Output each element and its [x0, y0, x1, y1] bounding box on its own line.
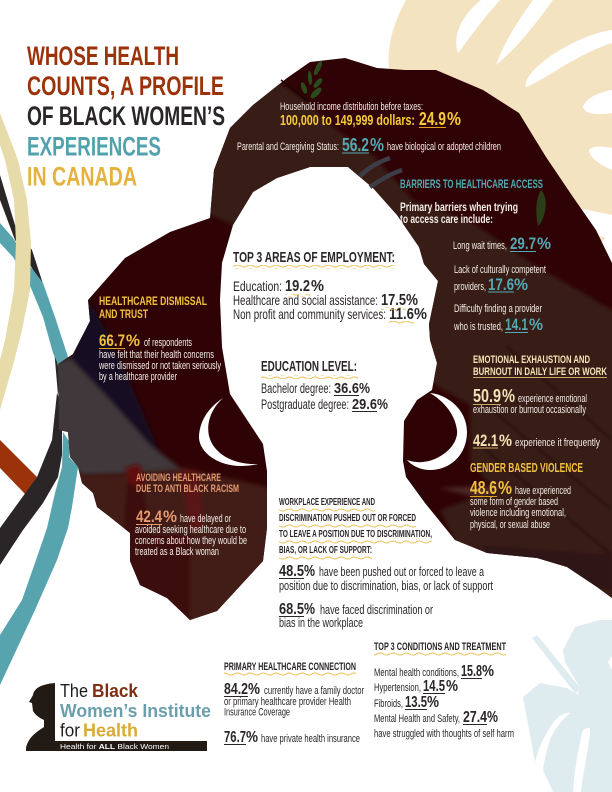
panel: education level: 36.6 — [334, 381, 359, 397]
title: OF BLACK WOMEN’S — [27, 101, 225, 131]
panel: barriers to healthcare access: 17.6 — [488, 275, 514, 294]
panel: avoiding healthcare due to anti black racism: concerns about how they would be — [135, 535, 247, 547]
logo: The Black Women's Institute for Health: Health — [83, 720, 138, 740]
panel: workplace experience and discrimination: DISCRIMINATION PUSHED OUT OR FORCED — [279, 513, 416, 524]
panel: healthcare dismissal and trust: AND TRUST — [99, 307, 148, 321]
panel: top 3 areas of employment: % — [311, 278, 324, 295]
panel: barriers to healthcare access — [400, 179, 551, 334]
panel: gender based violence: physical, or sexual abuse — [470, 519, 550, 531]
hair region: lower brown and maroon folds — [80, 462, 267, 620]
panel: top 3 areas of employment: 19.2 — [285, 278, 310, 295]
panel: top 3 conditions and treatment: 15.8 — [461, 663, 482, 680]
panel: top 3 areas of employment: % — [414, 306, 427, 323]
panel: primary healthcare connection: % — [248, 681, 260, 698]
panel: healthcare dismissal and trust: of respondents — [144, 337, 192, 349]
parental status stat: % — [370, 135, 384, 155]
panel: gender based violence: % — [498, 478, 512, 498]
household income stat: 24.9 — [419, 109, 446, 129]
title — [27, 41, 225, 192]
panel: top 3 conditions and treatment: % — [487, 709, 498, 726]
panel: top 3 conditions and treatment: Mental health conditions, — [374, 667, 459, 679]
panel: primary healthcare connection: Insurance Coverage — [224, 706, 290, 718]
panel: top 3 areas of employment: % — [406, 292, 418, 309]
panel: workplace experience and discrimination: % — [304, 601, 315, 618]
panel: barriers to healthcare access: % — [529, 315, 543, 334]
panel: top 3 conditions and treatment: Mental Health and Safety, — [374, 713, 460, 725]
panel: emotional exhaustion and burnout — [473, 354, 607, 450]
panel: education level: EDUCATION LEVEL: — [261, 358, 357, 375]
hair region: brown arm and hand — [210, 82, 612, 598]
panel: workplace experience and discrimination: 48.5 — [279, 563, 304, 580]
panel: primary healthcare connection: % — [246, 729, 258, 746]
decorative arc: rust band — [0, 440, 37, 495]
hair and profile silhouette — [58, 58, 612, 620]
panel: healthcare dismissal and trust: % — [126, 331, 140, 350]
title: WHOSE HEALTH — [27, 41, 179, 71]
panel: emotional exhaustion and burnout: % — [499, 431, 512, 450]
panel: gender based violence: have experienced — [515, 485, 571, 497]
panel: workplace experience and discrimination: 68.5 — [279, 601, 304, 618]
title: IN CANADA — [27, 162, 137, 192]
decorative arc: beige band — [0, 113, 31, 410]
panel: workplace experience and discrimination: TO LEAVE A POSITION DUE TO DISCRIMINATION, — [279, 529, 432, 540]
logo: The Black Women's Institute for Health: Health for ALL Black Women — [60, 742, 169, 751]
parental status stat: 56.2 — [342, 135, 369, 155]
panel: workplace experience and discrimination: have been pushed out or forced to leave a — [319, 564, 485, 579]
icon: top leaf sprig — [281, 60, 324, 101]
icon: right leaf sprig — [536, 190, 546, 226]
parental status stat: have biological or adopted children — [387, 141, 501, 153]
decorative arc: teal lower band — [0, 432, 78, 685]
panel: gender based violence: some form of gender based — [470, 496, 558, 508]
panel: top 3 areas of employment: TOP 3 AREAS OF EMPLOYMENT: — [233, 249, 395, 266]
logo: The Black Women's Institute for Health — [26, 681, 211, 751]
panel: top 3 conditions and treatment: Hypertension, — [374, 682, 421, 694]
title: EXPERIENCES — [27, 132, 161, 162]
panel: top 3 conditions and treatment: TOP 3 CONDITIONS AND TREATMENT — [374, 641, 506, 653]
panel: top 3 conditions and treatment: have struggled with thoughts of self harm — [374, 728, 514, 740]
panel: workplace experience and discrimination: bias in the workplace — [279, 615, 363, 630]
panel: primary healthcare connection: or primary healthcare provider Health — [224, 696, 351, 708]
panel: avoiding healthcare due to anti black racism: % — [163, 507, 177, 526]
panel: barriers to healthcare access: 29.7 — [510, 234, 536, 253]
hair region: navy and gray fabric — [58, 300, 182, 476]
panel: barriers to healthcare access: BARRIERS TO HEALTHCARE ACCESS — [400, 179, 543, 191]
panel: barriers to healthcare access: to access care include: — [400, 212, 493, 226]
panel: top 3 areas of employment: 11.6 — [389, 306, 414, 323]
background leaf: pale teal monstera — [523, 620, 612, 792]
icon: bracelet — [360, 158, 402, 187]
panel: barriers to healthcare access: 14.1 — [505, 315, 528, 334]
panel: avoiding healthcare due to anti black racism: 42.4 — [136, 507, 162, 526]
panel: healthcare dismissal and trust: by a healthcare provider — [99, 371, 177, 383]
panel: workplace experience and discrimination: % — [304, 563, 315, 580]
logo: The Black Women's Institute for Health: The — [60, 681, 88, 701]
panel: education level: Bachelor degree: — [261, 381, 331, 396]
panel: barriers to healthcare access: % — [537, 234, 551, 253]
panel: healthcare dismissal and trust: HEALTHCARE DISMISSAL — [99, 294, 207, 308]
panel: education level: % — [359, 381, 370, 397]
panel: barriers to healthcare access: Lack of culturally competent — [454, 264, 546, 276]
panel: primary healthcare connection: 76.7 — [224, 729, 246, 746]
panel: healthcare dismissal and trust: 66.7 — [99, 331, 125, 350]
panel: workplace experience and discrimination: BIAS, OR LACK OF SUPPORT: — [279, 545, 372, 556]
left crescent — [199, 398, 258, 466]
panel: healthcare dismissal and trust: were dismissed or not taken seriously — [98, 360, 221, 372]
panel: avoiding healthcare due to anti black racism: DUE TO ANTI BLACK RACISM — [136, 483, 239, 495]
panel: top 3 areas of employment — [233, 249, 427, 324]
panel: healthcare dismissal and trust: have felt that their health concerns — [99, 349, 214, 361]
panel: top 3 areas of employment: Healthcare and social assistance: — [233, 292, 378, 308]
panel: avoiding healthcare due to anti black racism: have delayed or — [180, 513, 231, 525]
panel: gender based violence: 48.6 — [470, 478, 497, 498]
panel: top 3 conditions and treatment — [374, 641, 514, 740]
panel: avoiding healthcare due to anti black racism: treated as a Black woman — [135, 546, 219, 558]
panel: top 3 conditions and treatment: Fibroids, — [374, 698, 403, 710]
panel: top 3 conditions and treatment: 14.5 — [423, 678, 445, 695]
panel: avoiding healthcare due to anti black racism: AVOIDING HEALTHCARE — [136, 472, 221, 484]
parental status stat: Parental and Caregiving Status: — [237, 141, 339, 153]
household income stat: 100,000 to 149,999 dollars: — [280, 113, 415, 129]
panel: top 3 areas of employment: Non profit and community services: — [233, 306, 386, 322]
panel: healthcare dismissal and trust — [98, 294, 221, 383]
panel: workplace experience and discrimination: position due to discrimination, bias, or lack of support — [279, 578, 493, 593]
panel: avoiding healthcare due to anti black racism: avoided seeking healthcare due to — [135, 524, 246, 536]
panel: education level: Postgraduate degree: — [261, 397, 349, 412]
parental status stat — [237, 135, 501, 155]
panel: education level — [261, 358, 388, 413]
panel: primary healthcare connection: PRIMARY HEALTHCARE CONNECTION — [224, 661, 356, 673]
decorative arc: black lower band — [0, 393, 62, 565]
background leaf: beige monstera — [388, 0, 612, 243]
panel: workplace experience and discrimination: WORKPLACE EXPERIENCE AND — [279, 497, 375, 508]
panel: gender based violence — [470, 460, 583, 531]
panel: top 3 conditions and treatment: 27.4 — [463, 709, 487, 726]
logo: The Black Women's Institute for Health: Black — [92, 681, 139, 701]
panel: emotional exhaustion and burnout: 50.9 — [473, 386, 501, 406]
panel: barriers to healthcare access: Difficulty finding a provider — [454, 303, 542, 315]
panel: workplace experience and discrimination: have faced discrimination or — [320, 602, 433, 617]
household income stat: % — [447, 109, 461, 129]
right crescent — [407, 393, 467, 470]
logo: The Black Women's Institute for Health: for — [60, 720, 80, 740]
household income stat: Household income distribution before taxes: — [280, 101, 423, 113]
panel: gender based violence: violence including emotional, — [470, 507, 566, 519]
panel: emotional exhaustion and burnout: % — [502, 386, 515, 406]
panel: education level: % — [377, 397, 388, 413]
panel: barriers to healthcare access: who is trusted, — [453, 321, 503, 333]
panel: education level: 29.6 — [352, 397, 377, 413]
panel: barriers to healthcare access: Long wait times, — [453, 240, 507, 252]
panel: primary healthcare connection — [224, 661, 364, 746]
decorative arc: teal upper band — [0, 223, 68, 382]
decorative arc: black upper band — [0, 175, 62, 395]
panel: primary healthcare connection: currently have a family doctor — [264, 685, 364, 697]
household income stat — [280, 101, 461, 129]
panel: top 3 conditions and treatment: % — [446, 678, 458, 695]
panel: top 3 conditions and treatment: 13.5 — [405, 694, 427, 711]
icon: logo silhouette and bar — [26, 683, 207, 751]
panel: workplace experience and discrimination — [279, 497, 493, 630]
panel: barriers to healthcare access: % — [514, 275, 528, 294]
panel: barriers to healthcare access: Primary barriers when trying — [400, 200, 518, 214]
panel: top 3 conditions and treatment: % — [482, 663, 494, 680]
panel: top 3 areas of employment: 17.5 — [381, 292, 406, 309]
panel: emotional exhaustion and burnout: 42.1 — [473, 431, 498, 450]
panel: primary healthcare connection: 84.2 — [224, 681, 248, 698]
panel: top 3 areas of employment: Education: — [233, 278, 282, 294]
panel: avoiding healthcare due to anti black racism — [135, 472, 247, 558]
panel: primary healthcare connection: have private health insurance — [261, 733, 360, 745]
logo: The Black Women's Institute for Health: Women’s Institute — [60, 701, 211, 721]
title: COUNTS, A PROFILE — [27, 71, 224, 101]
panel: barriers to healthcare access: providers, — [454, 281, 486, 293]
panel: top 3 conditions and treatment: % — [427, 694, 439, 711]
